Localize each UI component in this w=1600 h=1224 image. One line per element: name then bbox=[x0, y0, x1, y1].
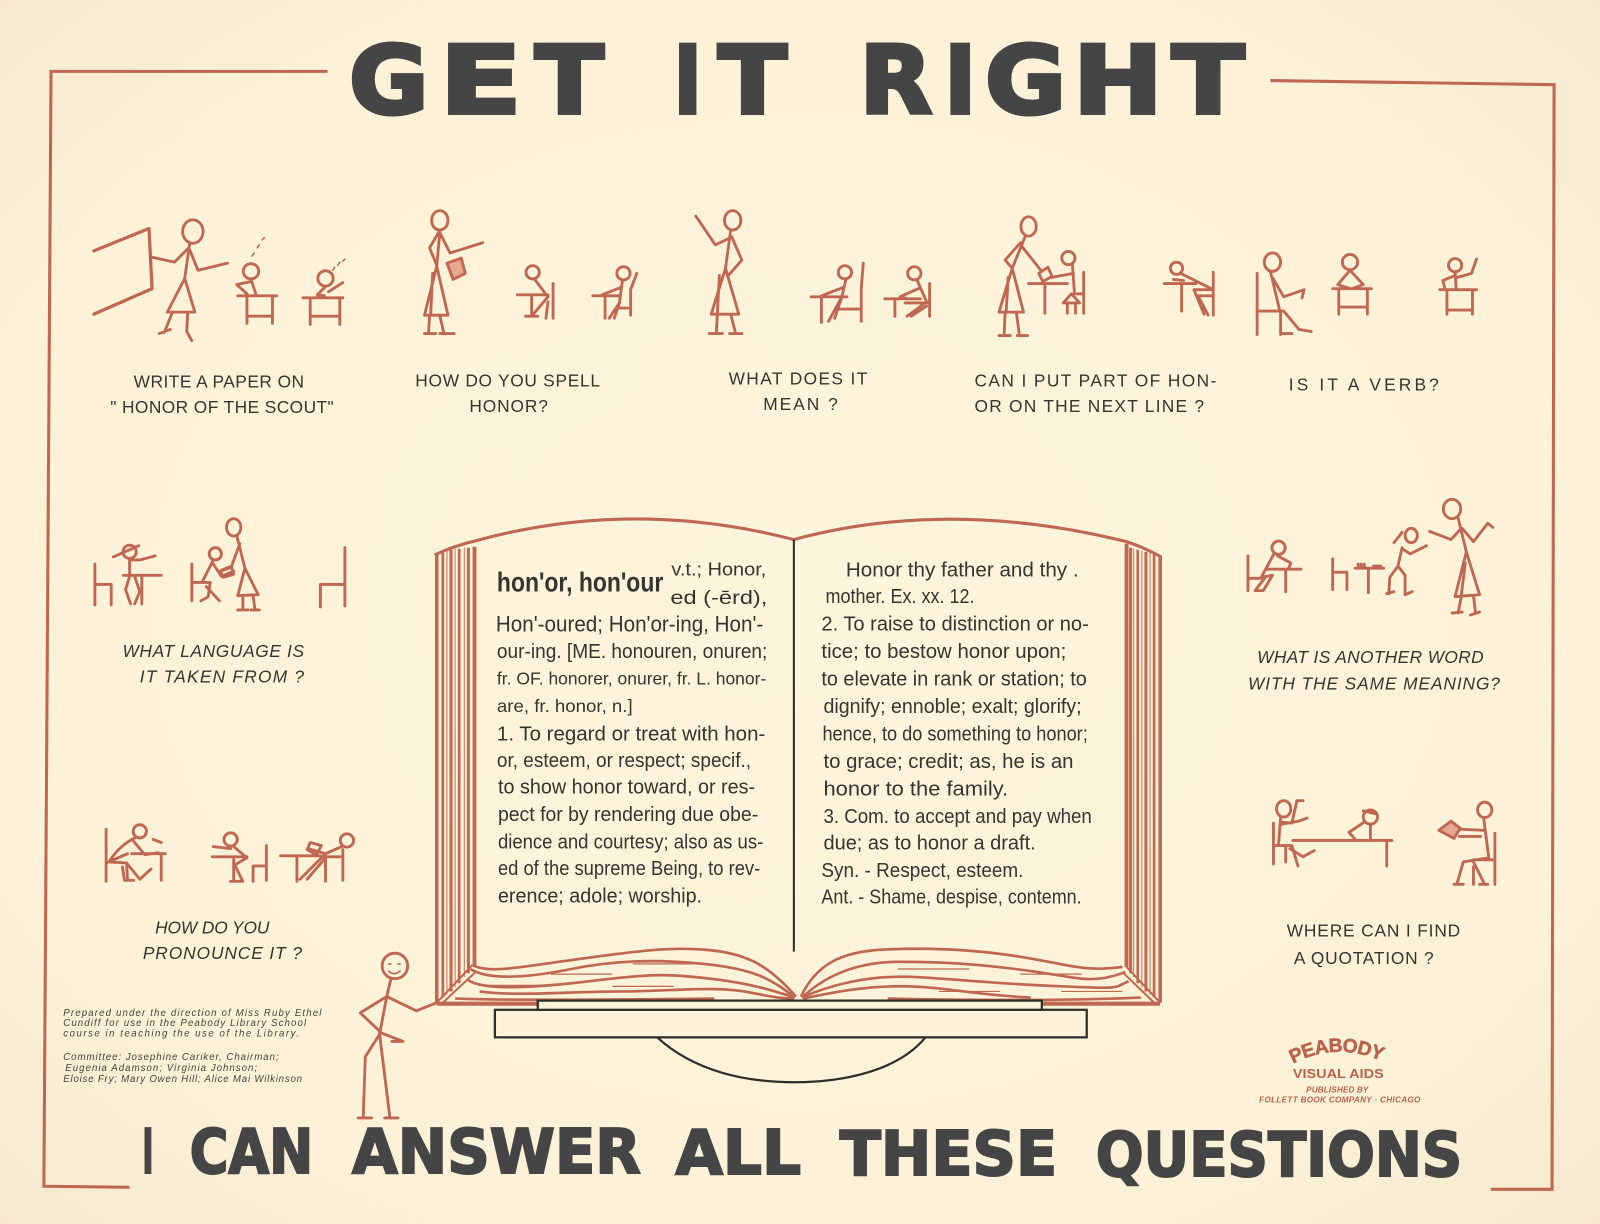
left dictionary page text: ed (-ērd), bbox=[670, 587, 767, 609]
bottom headline: ALL bbox=[676, 1118, 801, 1189]
left dictionary page text: our-ing. [ME. honouren, onuren; bbox=[497, 641, 767, 663]
scene 1: teacher at blackboard with two students bbox=[94, 220, 345, 341]
title: I bbox=[674, 27, 702, 136]
right dictionary page text bbox=[821, 559, 1092, 909]
scene 4 caption: CAN I PUT PART OF HON- bbox=[974, 371, 1216, 391]
scene 4 caption bbox=[974, 371, 1216, 416]
credits note bbox=[63, 1008, 322, 1085]
credits note: Prepared under the direction of Miss Ruby Ethel bbox=[63, 1008, 322, 1019]
bottom headline: THESE bbox=[840, 1119, 1057, 1190]
title: R bbox=[860, 27, 932, 136]
scene 8 caption: WITH THE SAME MEANING? bbox=[1248, 674, 1500, 694]
credits note: Eloise Fry; Mary Owen Hill; Alice Mai Wilkinson bbox=[63, 1074, 302, 1085]
title: H bbox=[1073, 27, 1163, 136]
scene 5: seated teacher with two students bbox=[1257, 253, 1477, 335]
right dictionary page text: Syn. - Respect, esteem. bbox=[821, 860, 1023, 882]
scene 6 caption bbox=[122, 641, 305, 686]
scene 1 caption: " HONOR OF THE SCOUT" bbox=[110, 397, 334, 417]
left page edge stripes bbox=[437, 547, 476, 1003]
credits note: Cundiff for use in the Peabody Library School bbox=[63, 1018, 307, 1029]
scene 3 caption: MEAN ? bbox=[763, 394, 838, 414]
title: T bbox=[1172, 26, 1244, 136]
scene 9 caption: WHERE CAN I FIND bbox=[1287, 920, 1460, 940]
left dictionary page text: v.t.; Honor, bbox=[671, 558, 766, 579]
scene 1 caption bbox=[110, 372, 334, 417]
right dictionary page text: Ant. - Shame, despise, contemn. bbox=[821, 887, 1082, 909]
right dictionary page text: Honor thy father and thy . bbox=[846, 559, 1079, 581]
book spine line bbox=[793, 540, 795, 952]
left dictionary page text: ed of the supreme Being, to rev- bbox=[498, 858, 760, 880]
scene 6 caption: IT TAKEN FROM ? bbox=[140, 666, 304, 686]
scene 3 caption: WHAT DOES IT bbox=[729, 369, 868, 389]
bottom headline: QUESTIONS bbox=[1096, 1120, 1462, 1191]
publisher logo bbox=[1259, 1038, 1421, 1105]
presenter stick figure bbox=[358, 953, 437, 1118]
left dictionary page text bbox=[496, 558, 767, 908]
scene 4 caption: OR ON THE NEXT LINE ? bbox=[974, 396, 1204, 416]
left dictionary page text: or, esteem, or respect; specif., bbox=[497, 750, 751, 772]
scene 2: teacher with book and two students bbox=[424, 211, 637, 334]
title: G bbox=[349, 28, 428, 136]
scene 9 caption: A QUOTATION ? bbox=[1294, 948, 1434, 968]
title: I bbox=[944, 27, 976, 136]
title bbox=[349, 26, 1244, 136]
right dictionary page text: to elevate in rank or station; to bbox=[821, 668, 1087, 690]
open dictionary book bbox=[435, 519, 1161, 1082]
scene 1 caption: WRITE A PAPER ON bbox=[134, 372, 304, 392]
scene 5 caption: IS IT A VERB? bbox=[1289, 375, 1439, 395]
title: T bbox=[535, 26, 604, 135]
publisher logo: PUBLISHED BY bbox=[1306, 1085, 1370, 1094]
left dictionary page text: 1. To regard or treat with hon- bbox=[497, 724, 765, 746]
scene 3: teacher with raised arm and two students bbox=[696, 211, 930, 334]
credits note: Eugenia Adamson; Virginia Johnson; bbox=[65, 1063, 257, 1074]
scene 9 caption bbox=[1287, 920, 1460, 968]
title: T bbox=[718, 26, 787, 135]
credits note: Committee: Josephine Cariker, Chairman; bbox=[63, 1052, 279, 1063]
scene 8: synonym figures with teacher bbox=[1248, 499, 1493, 615]
left dictionary page text: Hon'-oured; Hon'or-ing, Hon'- bbox=[496, 611, 763, 636]
title: E bbox=[440, 27, 522, 136]
scene 2 caption: HOW DO YOU SPELL bbox=[415, 371, 600, 391]
book stand bbox=[495, 1001, 1087, 1082]
right dictionary page text: to grace; credit; as, he is an bbox=[823, 751, 1073, 773]
scene 7 caption: PRONOUNCE IT ? bbox=[143, 943, 302, 963]
left dictionary page text: erence; adole; worship. bbox=[498, 886, 702, 908]
publisher logo: FOLLETT BOOK COMPANY · CHICAGO bbox=[1259, 1096, 1421, 1105]
right dictionary page text: 2. To raise to distinction or no- bbox=[821, 613, 1089, 635]
left dictionary page text: dience and courtesy; also as us- bbox=[498, 832, 763, 854]
right page block waves bbox=[801, 949, 1141, 1000]
left dictionary page text: are, fr. honor, n.] bbox=[497, 696, 633, 716]
bottom headline: CAN bbox=[190, 1117, 313, 1188]
left page block waves bbox=[455, 949, 796, 1000]
left dictionary page text: fr. OF. honorer, onurer, fr. L. honor- bbox=[497, 668, 766, 688]
scene 7 caption bbox=[143, 917, 302, 963]
right dictionary page text: dignify; ennoble; exalt; glorify; bbox=[823, 696, 1082, 718]
scene 7: pronunciation figures bbox=[106, 825, 354, 881]
bottom headline: ANSWER bbox=[352, 1117, 641, 1188]
scene 6 caption: WHAT LANGUAGE IS bbox=[122, 641, 305, 661]
publisher logo: PEABODY bbox=[1288, 1038, 1386, 1064]
right dictionary page text: honor to the family. bbox=[823, 779, 1008, 801]
left dictionary page text: hon'or, hon'our bbox=[497, 567, 664, 598]
left dictionary page text: pect for by rendering due obe- bbox=[498, 804, 758, 826]
scene 7 caption: HOW DO YOU bbox=[155, 917, 270, 937]
right dictionary page text: tice; to bestow honor upon; bbox=[821, 641, 1066, 663]
scene 8 caption: WHAT IS ANOTHER WORD bbox=[1257, 647, 1484, 667]
scene 4: teacher helping seated student, student bent over desk bbox=[999, 217, 1213, 336]
scene 3 caption bbox=[729, 369, 868, 414]
scene 9: quotation figures with table and reader bbox=[1273, 801, 1495, 884]
bottom headline bbox=[142, 1117, 1462, 1191]
left dictionary page text: to show honor toward, or res- bbox=[498, 777, 755, 799]
scene 6: language question figures bbox=[95, 519, 345, 610]
scene 2 caption: HONOR? bbox=[469, 396, 548, 416]
credits note: course in teaching the use of the Library. bbox=[63, 1028, 299, 1039]
right page edge stripes bbox=[1122, 544, 1160, 1003]
bottom headline: I bbox=[142, 1117, 154, 1188]
right dictionary page text: 3. Com. to accept and pay when bbox=[823, 806, 1092, 828]
title: G bbox=[985, 26, 1066, 136]
right dictionary page text: hence, to do something to honor; bbox=[822, 724, 1088, 746]
scene 8 caption bbox=[1248, 647, 1500, 694]
publisher logo: VISUAL AIDS bbox=[1293, 1066, 1384, 1081]
scene 2 caption bbox=[415, 371, 600, 416]
right dictionary page text: due; as to honor a draft. bbox=[823, 833, 1036, 855]
book pages outline bbox=[435, 519, 1161, 1004]
right dictionary page text: mother. Ex. xx. 12. bbox=[826, 586, 974, 608]
